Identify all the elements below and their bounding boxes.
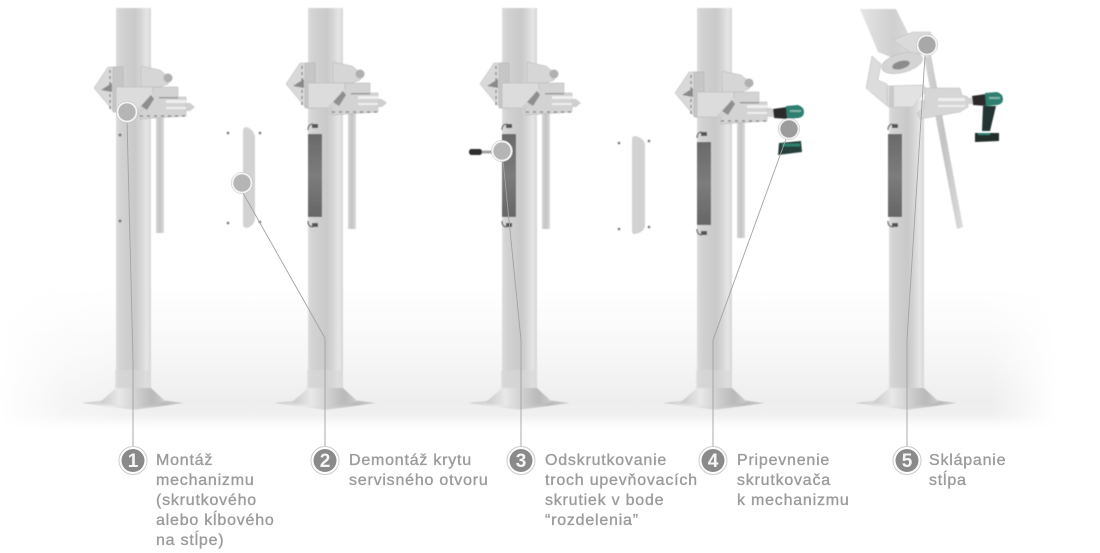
step 3 number badge: 3 bbox=[516, 451, 526, 472]
leader line 2 bbox=[243, 193, 325, 446]
pole 5 folded with drill bbox=[855, 9, 1003, 410]
step 4 number badge: 4 bbox=[708, 451, 719, 472]
step 4 number badge bbox=[699, 446, 727, 474]
step 3 text: skrutiek v bode bbox=[545, 492, 664, 509]
magnifier 5 bbox=[916, 34, 938, 56]
step 4 text: Pripevnenie bbox=[737, 452, 830, 469]
step 2 text: Demontáž krytu bbox=[349, 452, 472, 469]
leader line 4 bbox=[713, 139, 786, 446]
step 1 text: na stĺpe) bbox=[156, 530, 224, 549]
step 4 text: skrutkovača bbox=[737, 472, 831, 489]
step 1 text: mechanizmu bbox=[156, 472, 255, 489]
background haze bbox=[52, 354, 1024, 420]
removed service cover bbox=[227, 127, 261, 228]
leader line 3 bbox=[503, 160, 521, 446]
step 5 number badge: 5 bbox=[902, 451, 913, 472]
pole 4 with drill bbox=[663, 8, 804, 410]
step 3 number badge bbox=[507, 446, 535, 474]
removed cover with screws, step 3 bbox=[618, 136, 650, 234]
step 5 text: Sklápanie bbox=[929, 452, 1006, 469]
step 1 number badge: 1 bbox=[128, 451, 139, 472]
pole 2 with open service hole bbox=[274, 8, 387, 410]
step 1 number badge bbox=[119, 446, 147, 474]
step 3 text: “rozdelenia” bbox=[545, 512, 639, 529]
pole 3 with wrench bbox=[468, 8, 581, 410]
step 2 text: servisného otvoru bbox=[349, 472, 489, 489]
step 1 text: (skrutkového bbox=[156, 492, 257, 509]
step 1 text: Montáž bbox=[156, 452, 213, 469]
step 2 number badge bbox=[311, 446, 339, 474]
magnifier 2 bbox=[231, 172, 253, 194]
leader line 1 bbox=[127, 120, 133, 446]
leader line 5 bbox=[907, 56, 925, 446]
step 5 text: stĺpa bbox=[929, 470, 967, 489]
magnifier 1 bbox=[116, 101, 138, 123]
step 5 number badge bbox=[893, 446, 921, 474]
step 1 text: alebo kĺbového bbox=[156, 510, 275, 529]
step 2 number badge: 2 bbox=[320, 451, 330, 472]
pole 1 with mechanism bbox=[82, 8, 195, 410]
magnifier 3 bbox=[491, 140, 513, 162]
step 4 text: k mechanizmu bbox=[737, 492, 850, 509]
step 3 text: troch upevňovacích bbox=[545, 472, 698, 489]
step 3 text: Odskrutkovanie bbox=[545, 452, 667, 469]
magnifier 4 bbox=[778, 118, 800, 140]
